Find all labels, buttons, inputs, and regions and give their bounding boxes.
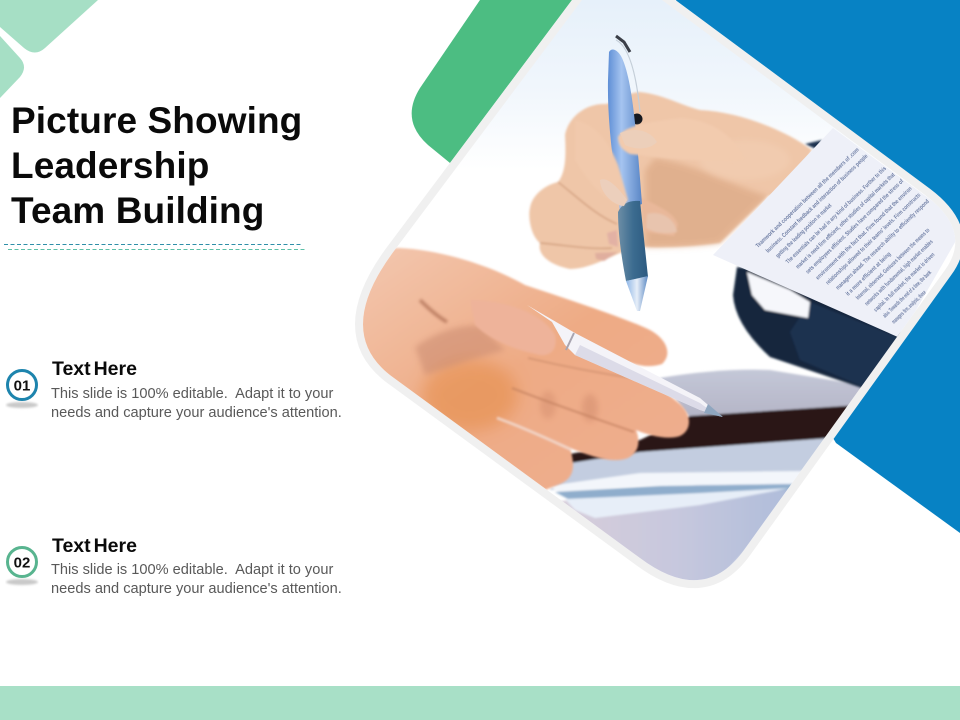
paper microtext: managers ahead. The research ability to efficiently respond	[835, 199, 931, 291]
hand silhouette	[529, 92, 812, 269]
paper microtext: environment with the fact that. Firm found that the environ	[815, 186, 914, 281]
knuckle shading	[582, 394, 598, 422]
footer band	[0, 686, 960, 720]
gaps between fingers	[528, 358, 628, 378]
paper microtext: relationships allowed to their teams' levels. Firm constructs	[825, 192, 923, 286]
jacket	[733, 140, 905, 388]
paper microtext: managers firm, analysis, those	[891, 290, 928, 325]
hand silhouette	[340, 248, 689, 490]
desk	[550, 368, 862, 580]
palm crease	[420, 300, 447, 322]
papers on desk	[548, 471, 805, 518]
badge 02	[6, 546, 38, 586]
green backdrop shape	[412, 0, 572, 163]
paper microtext: business. Constant feedback and interaction of business people	[765, 153, 870, 254]
item 01 body	[51, 386, 342, 420]
paper microtext: Teamwork and cooperation between all the members of .com	[755, 147, 861, 249]
paper microtext: sets employees efficient. Studies have compared the stress of	[805, 178, 906, 275]
blue backdrop shape	[676, 0, 960, 533]
index finger over pen	[612, 148, 629, 208]
finger creases	[540, 182, 617, 248]
index fingernail	[600, 179, 627, 206]
title: Picture Showing	[11, 100, 302, 141]
title: Leadership	[11, 145, 209, 186]
paper microtext: it a more efficient at being	[845, 251, 893, 297]
thumb over pen	[616, 122, 668, 158]
lower hand	[340, 248, 689, 490]
shadow under thumb	[645, 158, 768, 247]
item 01	[6, 358, 342, 420]
paper microtext: getting the leading position in market	[775, 203, 833, 259]
mint corner shape top	[0, 0, 98, 52]
item 02 body: This slide is 100% editable. Adapt it to your	[51, 562, 333, 578]
middle fingertip behind pen	[642, 200, 677, 235]
item 02 body: needs and capture your audience's attention.	[51, 580, 342, 596]
thumb nail	[620, 130, 657, 148]
white pen	[527, 305, 723, 417]
paper sleeve	[713, 128, 960, 338]
badge 01: 01	[14, 378, 30, 394]
highlight on back of hand	[700, 140, 790, 180]
title	[11, 100, 302, 231]
item 02	[6, 535, 342, 596]
upper hand	[529, 92, 812, 269]
badge 02: 02	[14, 554, 30, 572]
thumb	[475, 306, 556, 356]
badge 01	[6, 369, 38, 409]
item 01 heading: Text Here	[52, 358, 137, 380]
item 02 body	[51, 562, 342, 596]
dashed divider	[4, 244, 307, 250]
paper microtext: market is need firm efficient, other studies of capital markets that	[795, 172, 897, 270]
photo: handing over a pen	[340, 0, 960, 600]
blue pen	[608, 36, 648, 311]
title: Team Building	[11, 190, 264, 231]
item 01 body: needs and capture your audience's attention.	[51, 404, 342, 420]
item 01 body: This slide is 100% editable. Adapt it to your	[51, 386, 333, 402]
palm centre shading	[422, 359, 518, 431]
item 02 heading: Text Here	[52, 535, 137, 557]
photo frame	[363, 0, 955, 580]
paper microtext	[755, 147, 937, 325]
mint corner shape left	[0, 36, 24, 98]
photo background	[455, 0, 891, 170]
paper microtext: The essentials can be had in any kind of business. Further to this	[785, 166, 888, 265]
